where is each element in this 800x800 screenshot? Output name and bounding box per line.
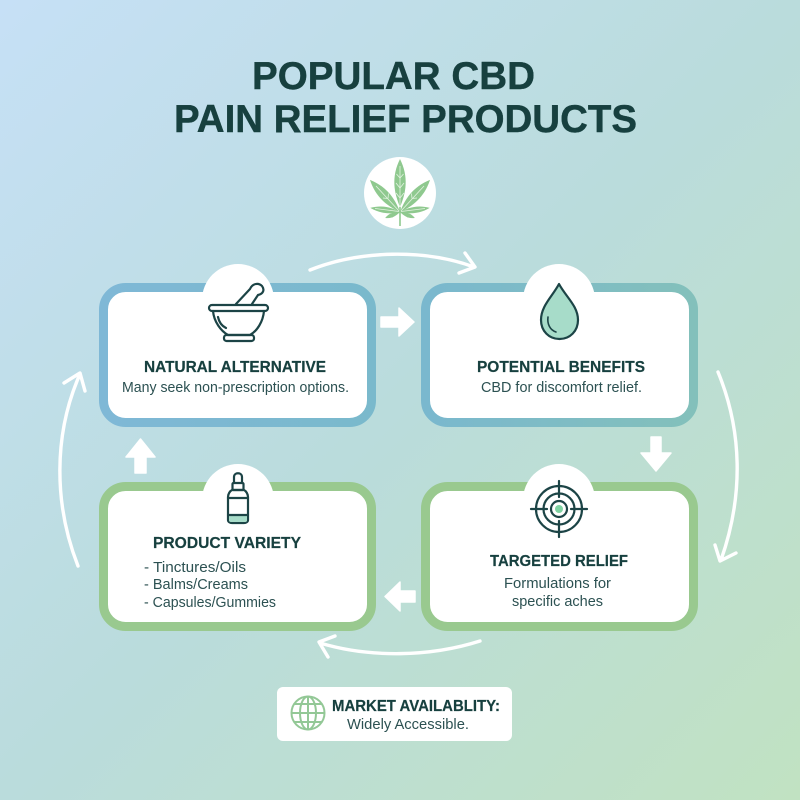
panel: product variety <box>104 464 372 626</box>
title: PAIN RELIEF PRODUCTS <box>174 98 637 141</box>
arrow: right curved <box>715 372 737 561</box>
icon: target <box>531 481 587 537</box>
text: widely accessible: Widely Accessible. <box>347 717 469 733</box>
text: product list <box>144 560 276 611</box>
icon: dropper bottle <box>228 473 248 523</box>
text: product list: - Capsules/Gummies <box>144 595 276 611</box>
text: potential benefits body: CBD for discomfort relief. <box>481 380 642 396</box>
panel: potential benefits <box>426 264 694 422</box>
text: targeted relief body: Formulations for <box>504 576 611 592</box>
arrow: variety to natural <box>126 439 155 473</box>
icon: drop <box>541 284 578 339</box>
text: product list: - Balms/Creams <box>144 577 248 593</box>
callout: market availability <box>277 687 512 741</box>
icon: globe <box>292 696 324 730</box>
heading: natural alternative: NATURAL ALTERNATIVE <box>144 359 326 376</box>
arrow: benefits to targeted <box>641 437 671 471</box>
arrow: left curved <box>60 373 85 566</box>
text: natural alternative body: Many seek non-prescription options. <box>122 380 349 396</box>
arrow: top curved <box>310 253 475 273</box>
heading: market availability: MARKET AVAILABLITY: <box>332 698 500 715</box>
heading: product variety: PRODUCT VARIETY <box>153 535 301 552</box>
panel: natural alternative <box>104 264 372 422</box>
text: targeted relief body: specific aches <box>512 594 603 610</box>
panel: targeted relief <box>426 464 694 626</box>
text: product list: - Tinctures/Oils <box>144 560 246 576</box>
title <box>174 55 637 141</box>
text: targeted relief body <box>504 576 611 610</box>
title: POPULAR CBD <box>252 55 535 98</box>
icon: mortar and pestle <box>209 284 268 341</box>
icon: cannabis leaf <box>364 157 436 229</box>
heading: potential benefits: POTENTIAL BENEFITS <box>477 359 645 376</box>
arrow: bottom curved <box>319 636 480 657</box>
heading: targeted relief: TARGETED RELIEF <box>490 553 628 570</box>
arrow: targeted to variety <box>385 582 415 611</box>
arrow: natural to benefits <box>381 308 414 336</box>
